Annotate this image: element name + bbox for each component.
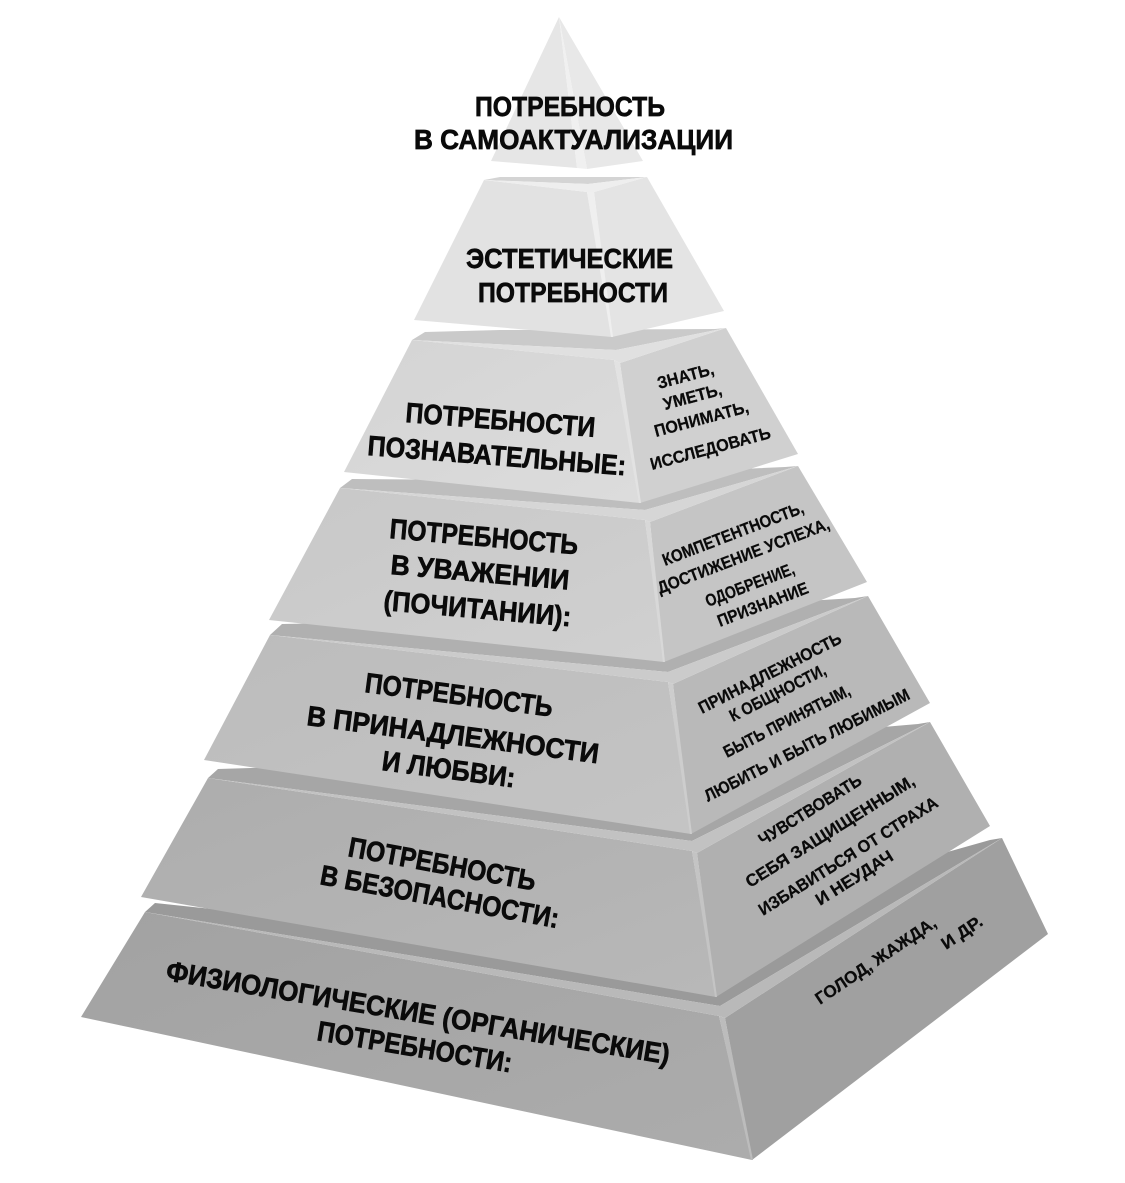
text: know, be able, understand, explore: ЗНАТЬ,	[655, 359, 716, 393]
text: know, be able, understand, explore	[648, 359, 773, 474]
tier 2: aesthetic needs	[414, 177, 724, 337]
text: feel protected: И НЕУДАЧ	[812, 847, 897, 909]
heading: aesthetic needs	[466, 243, 673, 308]
tier 1: self-actualization apex	[414, 17, 733, 169]
heading: esteem needs: (ПОЧИТАНИИ):	[382, 585, 572, 632]
tier 4: esteem needs	[269, 466, 867, 662]
heading: safety needs	[318, 831, 562, 934]
text: esteem: ДОСТИЖЕНИЕ УСПЕХА,	[655, 514, 832, 598]
heading: physiological needs: ФИЗИОЛОГИЧЕСКИЕ (ОРГАНИЧЕСКИЕ)	[164, 955, 672, 1070]
tier 6: safety needs	[141, 722, 990, 997]
heading: belonging and love: ПОТРЕБНОСТЬ	[363, 667, 555, 723]
text: belonging: ПРИНАДЛЕЖНОСТЬ	[695, 629, 845, 718]
heading: belonging and love: В ПРИНАДЛЕЖНОСТИ	[305, 700, 601, 769]
text: hunger, thirst: ГОЛОД, ЖАЖДА,	[812, 913, 940, 1008]
heading: safety needs: В БЕЗОПАСНОСТИ:	[318, 859, 562, 934]
heading: belonging and love: И ЛЮБВИ:	[380, 745, 517, 793]
tier 5: belonging and love	[204, 596, 930, 834]
heading: aesthetic needs: ПОТРЕБНОСТИ	[478, 277, 668, 308]
text: belonging: БЫТЬ ПРИНЯТЫМ,	[720, 681, 854, 762]
text: esteem: ПРИЗНАНИЕ	[715, 579, 811, 631]
text: feel protected: ЧУВСТВОВАТЬ	[755, 771, 865, 849]
heading: esteem needs: В УВАЖЕНИИ	[389, 549, 570, 596]
heading: aesthetic needs: ЭСТЕТИЧЕСКИЕ	[466, 243, 673, 274]
text: belonging: К ОБЩНОСТИ,	[726, 661, 829, 726]
heading: esteem needs: ПОТРЕБНОСТЬ	[388, 513, 579, 560]
heading: physiological needs: ПОТРЕБНОСТИ:	[315, 1015, 514, 1078]
text: hunger, thirst: И ДР.	[938, 912, 986, 953]
tier 7: physiological needs	[81, 838, 1048, 1160]
text: belonging: ЛЮБИТЬ И БЫТЬ ЛЮБИМЫМ	[701, 685, 913, 806]
text: belonging	[695, 629, 913, 806]
heading: self-actualization: ПОТРЕБНОСТЬ	[475, 91, 665, 122]
text: esteem: ОДОБРЕНИЕ,	[703, 559, 797, 611]
text: know, be able, understand, explore: УМЕТЬ,	[661, 380, 724, 414]
text: feel protected: ИЗБАВИТЬСЯ ОТ СТРАХА	[755, 793, 942, 919]
heading: cognitive needs: ПОЗНАВАТЕЛЬНЫЕ:	[367, 430, 627, 481]
text: feel protected: СЕБЯ ЗАЩИЩЕННЫМ,	[742, 771, 918, 891]
heading: esteem needs	[382, 513, 579, 632]
heading: self-actualization: В САМОАКТУАЛИЗАЦИИ	[414, 124, 733, 155]
heading: safety needs: ПОТРЕБНОСТЬ	[346, 831, 538, 897]
text: know, be able, understand, explore: ПОНИМАТЬ,	[652, 397, 751, 441]
text: esteem	[655, 498, 832, 631]
heading: self-actualization	[414, 91, 733, 155]
text: esteem: КОМПЕТЕНТНОСТЬ,	[660, 498, 806, 570]
heading: cognitive needs: ПОТРЕБНОСТИ	[405, 397, 596, 443]
tier 3: cognitive needs	[344, 328, 798, 503]
heading: cognitive needs	[367, 397, 627, 481]
heading: belonging and love	[305, 667, 601, 793]
text: know, be able, understand, explore: ИССЛЕДОВАТЬ	[648, 423, 773, 474]
